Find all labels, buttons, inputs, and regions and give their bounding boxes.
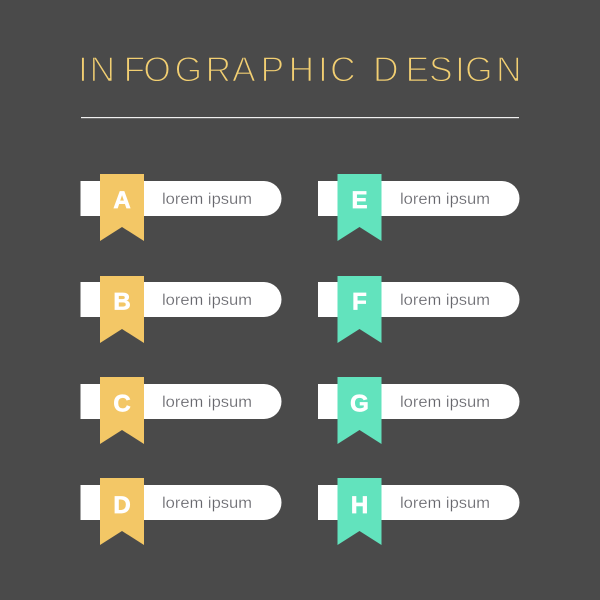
item B: B: [113, 288, 131, 316]
item D: [80, 478, 282, 545]
item F: lorem ipsum: [400, 292, 490, 309]
item C: C: [113, 390, 131, 418]
item D: lorem ipsum: [162, 495, 252, 512]
item E: E: [351, 187, 368, 214]
item D: D: [113, 492, 131, 519]
item H: [318, 478, 520, 545]
item B: [80, 276, 282, 343]
item A: A: [113, 187, 131, 214]
item G: lorem ipsum: [400, 394, 490, 411]
item H: lorem ipsum: [400, 495, 490, 512]
item E: lorem ipsum: [400, 191, 490, 208]
item H: H: [351, 492, 368, 519]
item A: lorem ipsum: [162, 191, 252, 208]
item B: lorem ipsum: [162, 292, 252, 309]
item F: F: [352, 288, 367, 316]
title: INFOGRAPHIC DESIGN: [78, 50, 522, 90]
item C: [80, 377, 282, 444]
item G: G: [350, 390, 369, 418]
item G: [318, 377, 520, 444]
item F: [318, 276, 520, 343]
item E: [318, 174, 520, 241]
item C: lorem ipsum: [162, 394, 252, 411]
item A: [80, 174, 282, 241]
